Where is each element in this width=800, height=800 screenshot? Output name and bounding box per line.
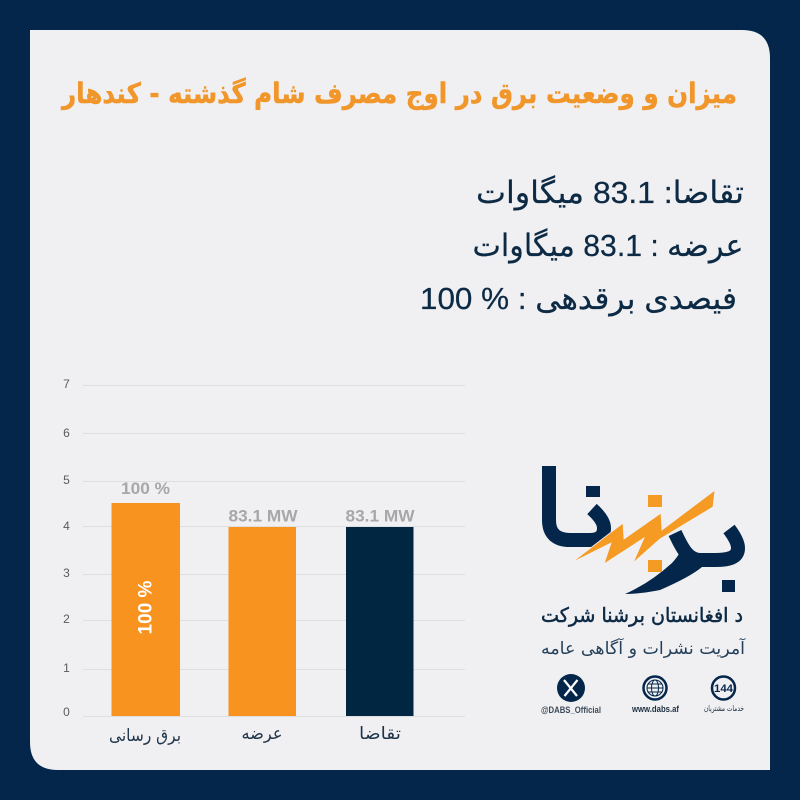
y axis labels: 4: [63, 519, 70, 533]
y axis labels: 6: [63, 426, 70, 440]
logo: orange dots: [648, 495, 662, 572]
y axis labels: 2: [63, 612, 70, 626]
department name: آمریت نشرات و آگاهی عامه: [541, 637, 746, 659]
bar: demand: [346, 527, 414, 716]
value labels: 83.1 MW: [228, 508, 298, 526]
logo: navy dots: [586, 486, 735, 592]
logo: navy letters: [549, 466, 738, 560]
category labels: [109, 724, 401, 746]
stat: supply percentage: فیصدی برقدهی : % 100: [420, 281, 737, 317]
icon: globe: [644, 676, 666, 700]
logo: [549, 466, 738, 594]
icon: 144 hotline: [712, 676, 735, 700]
y axis labels: 3: [63, 566, 70, 580]
y axis labels: 5: [63, 473, 70, 487]
value labels: [121, 480, 415, 526]
y axis labels: 0: [63, 705, 70, 719]
logo: lightning bolt: [571, 490, 715, 564]
stats text block: [420, 175, 744, 317]
rotated bar label: 100 %: [136, 580, 156, 634]
hotline caption: خدمات مشتریان: [704, 704, 744, 713]
y axis labels: [63, 377, 70, 719]
organisation name: د افغانستان برشنا شرکت: [541, 603, 743, 627]
category labels: برق رسانی: [109, 726, 181, 746]
bar chart: [63, 377, 465, 746]
value labels: 83.1 MW: [346, 508, 415, 526]
icon: X social: [557, 674, 585, 702]
y axis labels: 7: [63, 377, 70, 391]
value labels: 100 %: [121, 480, 170, 498]
bar: supply: [228, 527, 296, 716]
social handle: @DABS_Official: [541, 705, 601, 715]
category labels: تقاضا: [359, 724, 401, 744]
website: www.dabs.af: [631, 704, 680, 714]
stat: supply: عرضه : 83.1 میگاوات: [472, 228, 744, 264]
chart grid lines: [83, 386, 465, 716]
logo: navy tail: [625, 545, 702, 594]
category labels: عرضه: [242, 724, 282, 744]
stat: demand: تقاضا: 83.1 میگاوات: [476, 175, 744, 211]
y axis labels: 1: [63, 661, 70, 675]
bar: supply rate: [112, 503, 180, 716]
icon: 144 hotline: 144: [714, 683, 734, 695]
